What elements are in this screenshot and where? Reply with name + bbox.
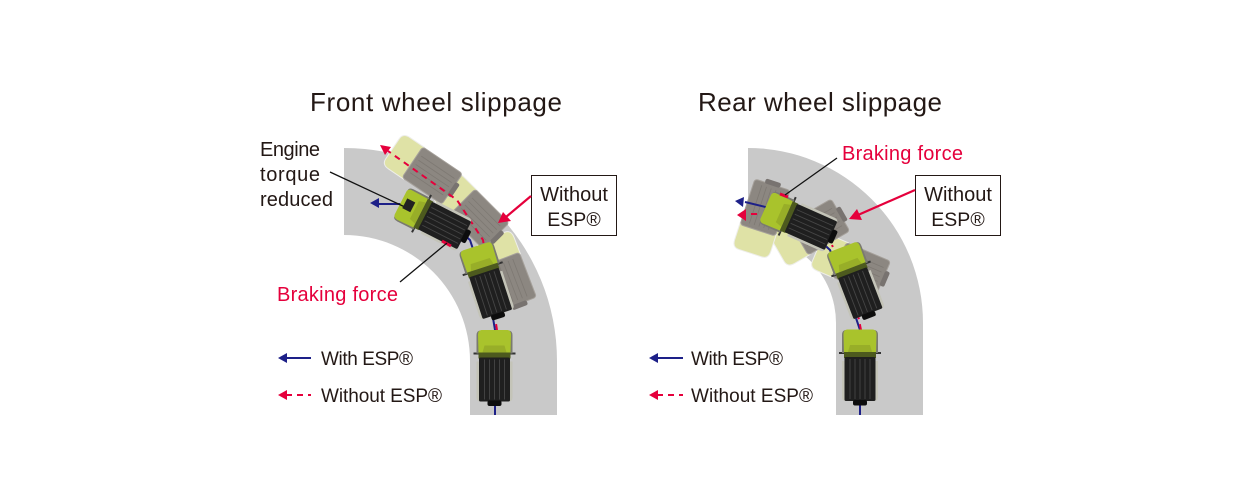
callout: without ESP [532, 176, 616, 236]
car: entering curve [823, 239, 889, 325]
car: ESP corrected [391, 184, 478, 256]
legend: without ESP: Without ESP® [321, 386, 442, 407]
label: braking force: Braking force [277, 284, 398, 306]
arrowhead: with ESP path [735, 197, 744, 207]
legend: with ESP [649, 349, 783, 370]
leader: braking force [400, 243, 447, 282]
car: straight [474, 330, 516, 406]
engine marker [402, 198, 415, 212]
label: engine torque reduced: Engine [260, 139, 320, 161]
path: without ESP [832, 245, 861, 330]
label: engine torque reduced: reduced [260, 189, 333, 211]
path: with ESP [745, 202, 860, 415]
callout: without ESP: ESP® [931, 209, 985, 231]
heading: rear wheel slippage: Rear wheel slippage [698, 87, 942, 117]
path: with ESP [378, 204, 495, 415]
heading: front wheel slippage: Front wheel slippage [310, 87, 562, 117]
arrow: callout to ghost path [498, 196, 531, 223]
legend: without ESP: Without ESP® [691, 386, 813, 407]
panel: rear wheel slippage diagram [649, 143, 1000, 415]
ghost cars without ESP [732, 175, 894, 297]
legend: with ESP: With ESP® [691, 349, 783, 370]
label: braking force: Braking force [842, 143, 963, 165]
label: engine torque reduced: torque [260, 164, 320, 186]
callout: without ESP: ESP® [547, 209, 601, 231]
road: front curve [344, 148, 557, 415]
legend: with ESP: With ESP® [321, 349, 413, 370]
leader: braking force [785, 158, 837, 195]
braking mark [780, 194, 788, 197]
legend: with ESP [278, 349, 413, 370]
leader: engine torque [330, 172, 407, 208]
callout: without ESP: Without [924, 184, 992, 206]
car: ESP corrected [757, 188, 844, 257]
arrow: callout to ghost path [849, 190, 915, 220]
arrow: without ESP path [737, 209, 757, 221]
car: straight [839, 330, 881, 406]
braking mark [442, 241, 451, 246]
ghost cars without ESP [382, 133, 538, 314]
car: entering curve [455, 240, 519, 325]
arrowhead: without ESP path [380, 145, 391, 155]
panel: front wheel slippage diagram [260, 133, 616, 415]
path: without ESP [388, 151, 497, 330]
callout: without ESP: Without [540, 184, 608, 206]
road: rear curve [748, 148, 923, 415]
arrowhead: with ESP path [370, 198, 379, 208]
callout: without ESP [916, 176, 1000, 236]
